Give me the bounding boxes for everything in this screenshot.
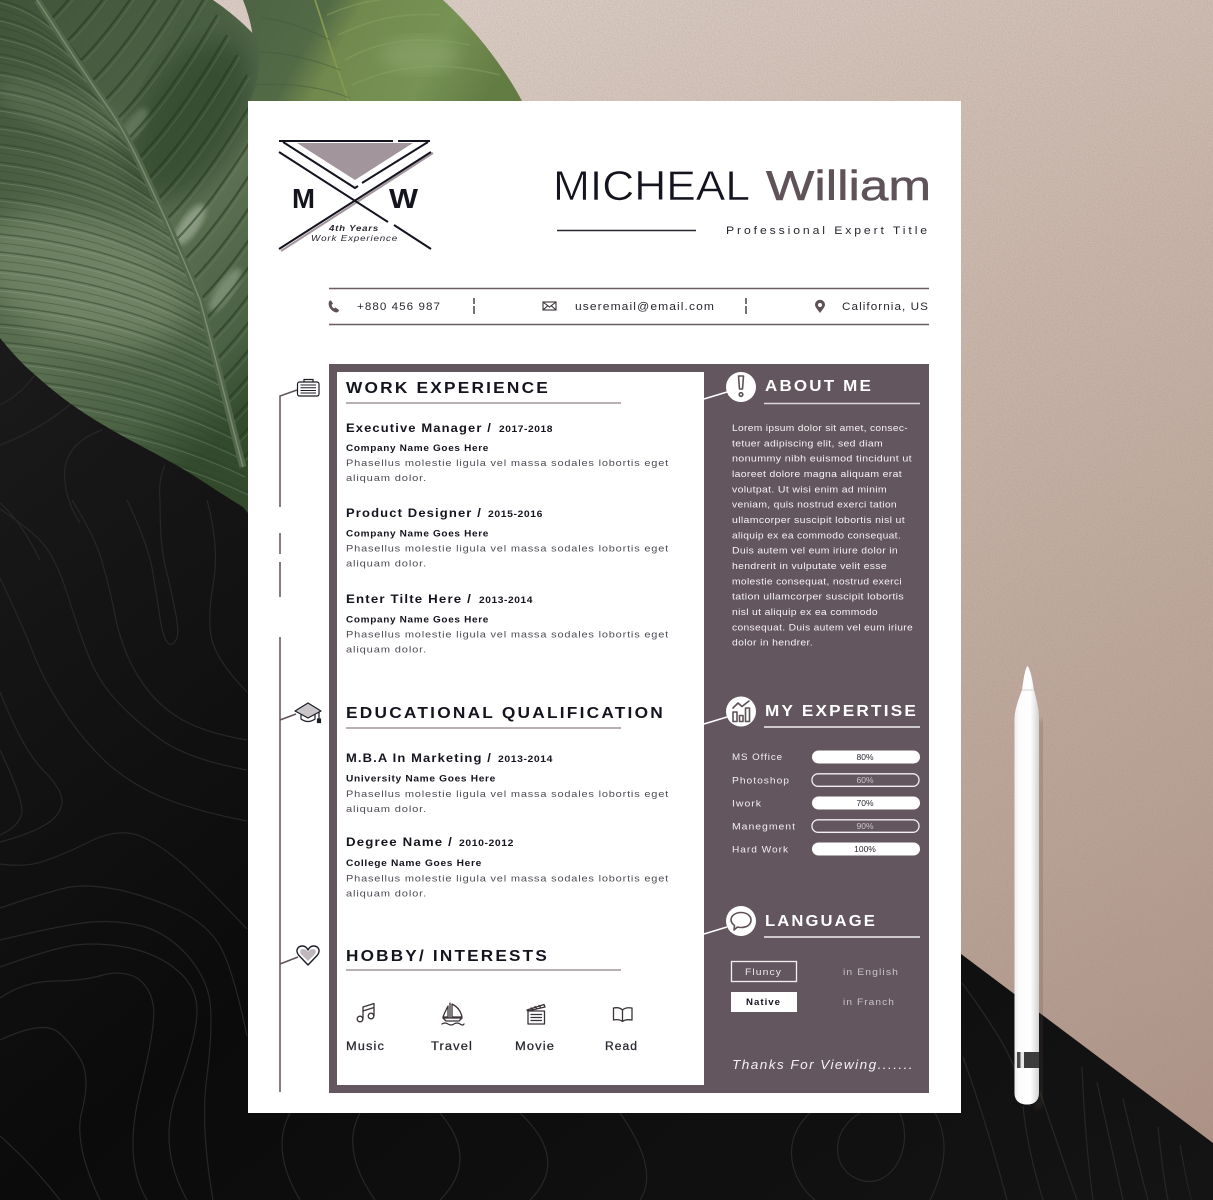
about text block: Duis autem vel eum iriure dolor in <box>732 546 898 557</box>
title: name: William <box>766 162 931 209</box>
entry: enter title <box>346 594 669 656</box>
about text block: tetuer adipiscing elit, sed diam <box>732 438 883 449</box>
heading rule <box>764 402 920 404</box>
entry: enter title: 2013-2014 <box>479 595 533 605</box>
label: read: Read <box>605 1041 638 1053</box>
icon: briefcase <box>298 380 319 396</box>
section: language <box>704 906 920 1012</box>
icon: heart <box>297 946 319 965</box>
icon: graduation cap <box>295 703 321 722</box>
panel: white content column <box>337 372 704 1085</box>
entry: product designer: 2015-2016 <box>488 509 543 519</box>
contact bar <box>329 288 929 324</box>
entry: mba: 2013-2014 <box>498 754 553 764</box>
skill: iwork 70% <box>732 796 920 810</box>
entry: executive manager <box>346 423 669 484</box>
entry: degree: Phasellus molestie ligula vel massa sodales lobortis eget <box>346 874 669 884</box>
about text block <box>732 423 913 649</box>
skill: ms office 80% <box>732 750 920 764</box>
background: tan paper surface <box>213 0 1213 1143</box>
connector <box>704 392 727 399</box>
entry: executive manager: Executive Manager / <box>346 423 492 435</box>
about text block: tation ullamcorper suscipit lobortis <box>732 592 904 603</box>
about text block: consequat. Duis autem vel eum iriure <box>732 622 913 633</box>
skill: iwork 70%: Iwork <box>732 798 762 810</box>
label: travel: Travel <box>431 1041 473 1053</box>
badge: fluncy <box>732 962 796 982</box>
entry: product designer: aliquam dolor. <box>346 558 427 570</box>
skill: hard work 100% <box>732 842 920 856</box>
skill: hard work 100%: Hard Work <box>732 844 789 856</box>
closing note: Thanks For Viewing....... <box>732 1058 914 1072</box>
skill: photoshop 60% <box>732 774 919 786</box>
title: name: MICHEAL <box>553 162 750 209</box>
entry: enter title: Enter Tilte Here / <box>346 594 472 606</box>
icon: speech bubble badge <box>726 906 756 936</box>
icon: music note <box>357 1004 374 1022</box>
label: in english: in English <box>843 967 899 978</box>
connector <box>704 927 727 934</box>
skill: manegment 90%: Manegment <box>732 822 796 832</box>
about text block: molestie consequat, nostrud exerci <box>732 576 902 587</box>
entry: enter title: Phasellus molestie ligula vel massa sodales lobortis eget <box>346 630 669 640</box>
entry: mba: aliquam dolor. <box>346 804 427 815</box>
phone number: +880 456 987 <box>357 301 441 313</box>
section: my expertise <box>704 696 920 856</box>
about text block: hendrerit in vulputate velit esse <box>732 561 887 572</box>
section: educational qualification <box>346 705 669 900</box>
title: name <box>553 162 931 209</box>
skill: iwork 70%: 70% <box>856 798 874 808</box>
label: in franch: in Franch <box>843 997 895 1008</box>
icon: exclamation badge <box>726 372 756 402</box>
divider <box>474 298 746 314</box>
skill: manegment 90%: 90% <box>856 821 874 831</box>
about text block: laoreet dolore magna aliquam erat <box>732 469 902 480</box>
section: work experience <box>346 380 669 656</box>
stylus pencil <box>1014 666 1042 1107</box>
logo: MW crossed lines emblem: Work Experience <box>311 233 398 243</box>
heading: WORK EXPERIENCE <box>346 380 550 397</box>
logo: MW crossed lines emblem: W <box>389 183 419 214</box>
icon: chart badge <box>726 696 756 726</box>
subtitle: professional title: Professional Expert Title <box>726 225 930 237</box>
icon: sailboat <box>442 1003 464 1025</box>
heading: HOBBY/ INTERESTS <box>346 948 549 965</box>
connector <box>704 717 727 724</box>
about text block: aliquip ex ea commodo consequat. <box>732 530 901 541</box>
skill: photoshop 60%: 60% <box>856 775 874 785</box>
entry: product designer: Company Name Goes Here <box>346 528 489 538</box>
entry: degree: College Name Goes Here <box>346 858 482 868</box>
leaf: large dark glossy leaf <box>0 0 257 513</box>
resume paper <box>248 101 961 1113</box>
heading rule <box>764 726 920 728</box>
skill: photoshop 60%: Photoshop <box>732 776 790 786</box>
entry: mba: University Name Goes Here <box>346 774 496 784</box>
label: movie: Movie <box>515 1041 555 1053</box>
heading rule <box>764 936 920 938</box>
logo: MW crossed lines emblem <box>279 141 433 251</box>
pencil band <box>1014 1052 1039 1068</box>
icon: open book <box>614 1008 632 1022</box>
about text block: nonummy nibh euismod tincidunt ut <box>732 454 912 465</box>
skill: ms office 80%: MS Office <box>732 752 783 763</box>
badge: native <box>731 992 797 1012</box>
entry: product designer <box>346 508 669 570</box>
heading: EDUCATIONAL QUALIFICATION <box>346 705 665 722</box>
heading rule <box>346 969 621 971</box>
heading rule <box>346 402 621 404</box>
skill: manegment 90% <box>732 820 919 832</box>
entry: executive manager: Company Name Goes Here <box>346 443 489 453</box>
skill: hard work 100%: 100% <box>854 844 876 854</box>
main panel: dark frame <box>329 364 929 1093</box>
entry: executive manager: 2017-2018 <box>499 424 553 434</box>
entry: mba: M.B.A In Marketing / <box>346 753 492 765</box>
entry: degree: aliquam dolor. <box>346 888 427 900</box>
entry: executive manager: aliquam dolor. <box>346 473 427 484</box>
about text block: volutpat. Ut wisi enim ad minim <box>732 484 887 495</box>
email: useremail@email.com <box>575 301 715 313</box>
icon: location pin <box>815 300 825 313</box>
badge: fluncy: Fluncy <box>745 967 782 978</box>
entry: mba: Phasellus molestie ligula vel massa sodales lobortis eget <box>346 789 669 800</box>
about text block: dolor in hendrer. <box>732 638 813 649</box>
heading: MY EXPERTISE <box>765 703 918 720</box>
entry: mba <box>346 753 669 815</box>
heading rule <box>346 727 621 729</box>
entry: degree: 2010-2012 <box>459 838 514 848</box>
label: music: Music <box>346 1041 385 1053</box>
badge: native: Native <box>746 997 781 1008</box>
leaf: light green back leaf <box>240 0 530 105</box>
icon: film clapper <box>527 1004 545 1024</box>
icon: envelope <box>543 302 556 310</box>
about text block: nisl ut aliquip ex ea commodo <box>732 607 878 618</box>
section: about me <box>704 372 920 649</box>
timeline rail <box>280 390 298 1092</box>
logo: MW crossed lines emblem: M <box>292 183 315 214</box>
logo: MW crossed lines emblem: 4th Years <box>328 223 379 233</box>
entry: degree: Degree Name / <box>346 837 453 849</box>
about text block: veniam, quis nostrud exerci tation <box>732 500 897 511</box>
entry: executive manager: Phasellus molestie ligula vel massa sodales lobortis eget <box>346 458 669 469</box>
about text block: Lorem ipsum dolor sit amet, consec- <box>732 423 908 434</box>
entry: degree <box>346 837 669 900</box>
heading: LANGUAGE <box>765 913 877 930</box>
icon: phone <box>329 300 339 312</box>
entry: enter title: Company Name Goes Here <box>346 614 489 624</box>
entry: product designer: Phasellus molestie ligula vel massa sodales lobortis eget <box>346 544 669 554</box>
skill: ms office 80%: 80% <box>856 752 874 762</box>
heading: ABOUT ME <box>765 378 873 395</box>
location: California, US <box>842 301 929 313</box>
entry: enter title: aliquam dolor. <box>346 644 427 656</box>
section: hobby interests <box>346 948 638 1053</box>
entry: product designer: Product Designer / <box>346 508 482 520</box>
about text block: ullamcorper suscipit lobortis nisl ut <box>732 515 905 526</box>
